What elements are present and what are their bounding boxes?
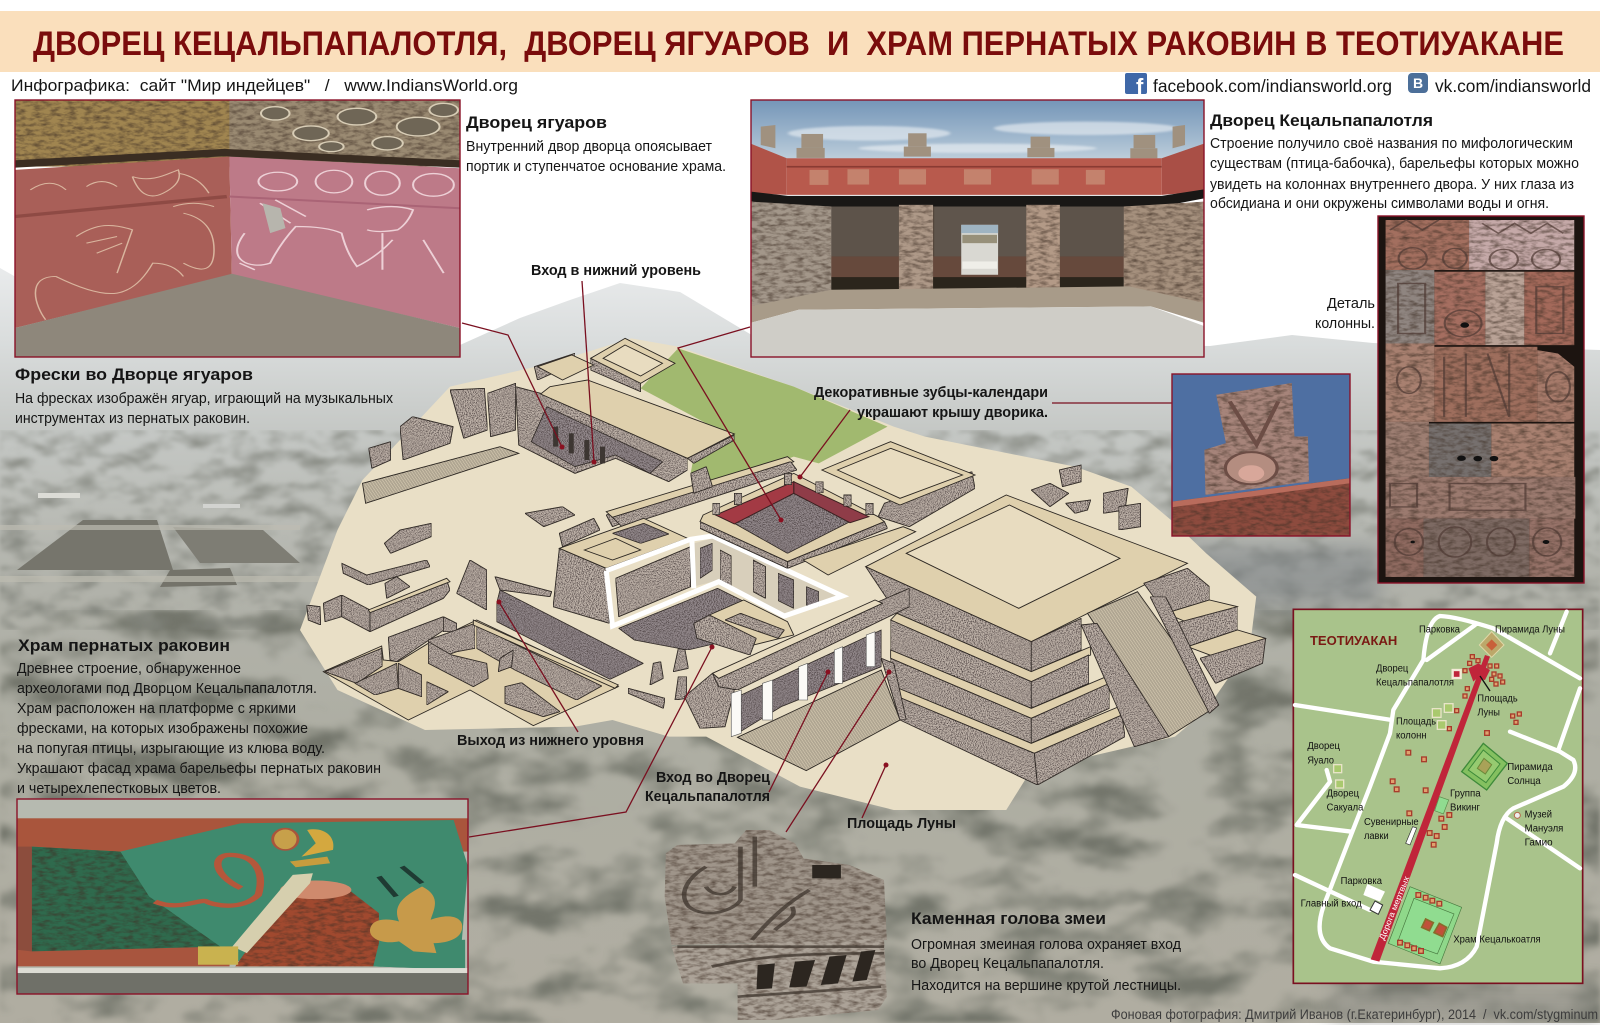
map labels: Площадь — [1396, 716, 1436, 727]
text: serpent description: во Дворец Кецальпапалотля. — [911, 955, 1104, 972]
heading: Quetzalpapalotl palace: Дворец Кецальпапалотля — [1210, 112, 1433, 130]
text: frescoes description — [15, 390, 393, 427]
text: temple description: и четырехлепестковых цветов. — [17, 780, 221, 797]
map labels: Луны — [1477, 707, 1500, 718]
map labels: Группа — [1450, 789, 1481, 800]
photo: merlon — [1172, 374, 1350, 536]
text: temple description: археологами под Дворцом Кецальпапалотля. — [17, 680, 317, 697]
text: frescoes description: На фресках изображён ягуар, играющий на музыкальных — [15, 390, 393, 407]
map labels: Площадь — [1477, 694, 1518, 705]
map labels: Парковка — [1341, 876, 1382, 887]
map labels: колонн — [1396, 730, 1427, 741]
white cut section with columns — [606, 536, 842, 655]
photo: Quetzalpapalotl courtyard — [750, 100, 1205, 357]
heading: temple of feathered shells: Храм пернатых раковин — [18, 637, 230, 655]
icon: vk — [1408, 73, 1428, 93]
lower level rooms, ramp and free standing columns — [307, 560, 688, 726]
photo: parrot fresco — [17, 799, 468, 994]
label: calendar merlons — [814, 384, 1048, 421]
label: palace entrance: Кецальпапалотля — [645, 788, 770, 805]
text: Quetzalpapalotl description — [1210, 135, 1579, 212]
label: lower level entrance: Вход в нижний уровень — [531, 262, 701, 279]
rear courtyard with red roof — [700, 473, 888, 568]
source credit line: Инфографика: сайт "Мир индейцев" / www.IndiansWorld.org — [11, 76, 518, 95]
photo: column detail — [1378, 216, 1584, 583]
text: jaguar palace description: портик и ступенчатое основание храма. — [466, 158, 726, 175]
text: temple description: Украшают фасад храма барельефы пернатых раковин — [17, 760, 381, 777]
text: jaguar palace description: Внутренний двор дворца опоясывает — [466, 138, 712, 155]
text: Quetzalpapalotl description: Строение получило своё названия по мифологическим — [1210, 135, 1573, 152]
map labels: Главный вход — [1301, 899, 1362, 910]
icon: vk: В — [1413, 75, 1423, 91]
photo: jaguar frescoes — [15, 100, 460, 357]
heading: stone serpent head: Каменная голова змеи — [911, 910, 1106, 928]
map labels: Дворец — [1327, 789, 1359, 800]
text: temple description — [17, 660, 381, 797]
map labels: Сувенирные — [1364, 817, 1419, 828]
icon: facebook: f — [1136, 74, 1144, 99]
facebook link: facebook.com/indiansworld.org — [1153, 76, 1392, 96]
photo: stone serpent head — [665, 830, 887, 1020]
text: temple description: Древнее строение, обнаруженное — [17, 660, 241, 677]
text: jaguar palace description — [466, 138, 726, 175]
title banner — [0, 11, 1600, 72]
caption: column detail — [1315, 295, 1375, 332]
heading: frescoes: Фрески во Дворце ягуаров — [15, 366, 253, 384]
text: temple description: на попугая птицы, изрыгающие из клюва воду. — [17, 740, 325, 757]
map labels: Гамио — [1525, 838, 1553, 849]
text: Quetzalpapalotl description: увидеть на колоннах внутреннего двора. У них глаза из — [1210, 176, 1574, 193]
Temple of Quetzalcoatl — [1388, 887, 1462, 964]
entrance portico, columns and stair — [684, 588, 909, 771]
map labels: Сакуала — [1327, 803, 1364, 814]
label: palace entrance: Вход во Дворец — [656, 769, 771, 786]
stepped pyramid platform — [866, 495, 1266, 785]
map labels — [1301, 624, 1565, 945]
text: temple description: фресками, на которых изображены похожие — [17, 720, 308, 737]
text: serpent description: Огромная змеиная голова охраняет вход — [911, 936, 1181, 953]
map labels: Парковка — [1419, 624, 1460, 635]
Pyramid of the Moon — [1479, 632, 1504, 657]
map of Teotihuacan — [1293, 609, 1583, 983]
label: calendar merlons: украшают крышу дворика. — [857, 404, 1048, 421]
map labels: Кецальпапалотля — [1376, 678, 1454, 689]
text: serpent description: Находится на вершине крутой лестницы. — [911, 977, 1181, 994]
right square courtyard — [803, 442, 1141, 575]
label: calendar merlons: Декоративные зубцы-календари — [814, 384, 1048, 401]
caption: column detail: колонны. — [1315, 315, 1375, 332]
map roads — [1295, 612, 1580, 968]
map labels: Музей — [1525, 810, 1552, 821]
text: Quetzalpapalotl description: существам (птица-бабочка), барельефы которых можно — [1210, 155, 1579, 172]
Pyramid of the Sun — [1462, 743, 1507, 790]
text: frescoes description: инструментах из пернатых раковин. — [15, 410, 250, 427]
map labels: Дворец — [1307, 741, 1340, 752]
isometric cutaway illustration of the palace — [300, 338, 1266, 810]
map labels: Дворец — [1376, 664, 1409, 675]
caption: column detail: Деталь — [1327, 295, 1375, 312]
text: Quetzalpapalotl description: обсидиана и они окружены символами воды и огня. — [1210, 195, 1549, 212]
map labels: Солнца — [1507, 776, 1541, 787]
central tower — [553, 518, 688, 623]
map labels: Яуало — [1307, 755, 1334, 766]
map labels: Храм Кецалькоатля — [1453, 934, 1541, 945]
label: Plaza of the Moon: Площадь Луны — [847, 815, 956, 832]
map labels: лавки — [1364, 831, 1389, 842]
map labels: Пирамида — [1507, 762, 1553, 773]
parchment ground and upper buildings — [300, 338, 1256, 810]
small map structures — [1334, 655, 1521, 953]
map labels: ТЕОТИУАКАН — [1310, 634, 1397, 648]
map labels: Викинг — [1450, 803, 1480, 814]
label: lower level exit: Выход из нижнего уровня — [457, 732, 644, 749]
central buildings, courtyard, pyramid and portico — [553, 442, 1266, 785]
text: temple description: Храм расположен на платформе с яркими — [17, 700, 296, 717]
label: palace entrance — [645, 769, 771, 805]
icon: facebook — [1125, 73, 1147, 99]
text: serpent description — [911, 936, 1181, 994]
Avenue of the Dead: Дорога мертвых — [1377, 874, 1412, 941]
map labels: Пирамида Луны — [1495, 624, 1565, 635]
leader lines with dots — [462, 281, 1172, 837]
vk link: vk.com/indiansworld — [1435, 76, 1591, 96]
map labels: Мануэля — [1525, 824, 1563, 835]
heading: jaguar palace: Дворец ягуаров — [466, 114, 607, 132]
Avenue of the Dead — [1371, 655, 1490, 962]
